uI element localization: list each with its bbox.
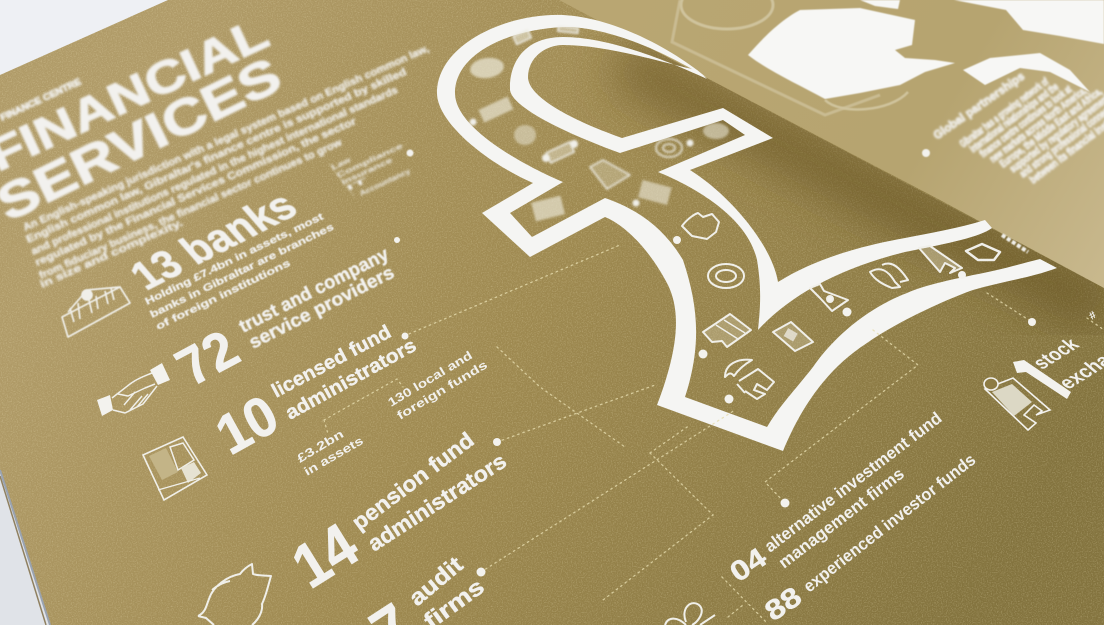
stat: 7 audit firms — [359, 551, 489, 625]
dotted connector lines — [324, 245, 1104, 623]
stat: 72 trust and company service providers: trust and company — [235, 243, 392, 337]
right page — [559, 0, 1104, 288]
icon: money bag — [810, 284, 852, 316]
stat: 7 audit firms: audit — [404, 551, 468, 611]
icon: document — [773, 322, 813, 351]
right page paragraph — [958, 76, 1104, 186]
stat: 88 experienced investor funds — [759, 450, 979, 625]
stat: 10 licensed fund administrators: licensed fund — [268, 321, 395, 402]
list dot — [406, 150, 414, 156]
stat: 04 alternative investment fund management firms: alternative investment fund — [761, 408, 945, 556]
icon: handshake — [97, 363, 170, 416]
icon: money bag — [590, 160, 630, 189]
stat dot 14 — [493, 438, 501, 446]
icon: umbrella and house — [724, 360, 774, 404]
world map — [748, 0, 1104, 99]
icon: vault — [469, 56, 505, 80]
stat: 72 trust and company service providers — [165, 243, 397, 397]
fund note: foreign funds — [394, 357, 490, 423]
pound sign inner contour — [510, 37, 992, 330]
stat dot 72 — [394, 237, 400, 243]
stat: 10 licensed fund administrators — [205, 321, 420, 466]
stat: 14 pension fund administrators — [281, 427, 511, 602]
intro paragraph: regulated by the Financial Services Commission, the sector — [33, 115, 358, 269]
stat: 72 trust and company service providers: service providers — [245, 261, 397, 353]
icon: document — [143, 437, 207, 500]
icon: small top a — [513, 30, 531, 44]
stat: 72 trust and company service providers: 72 — [165, 320, 250, 397]
icon: piggy bank — [198, 564, 271, 625]
faint circle — [681, 0, 773, 29]
intro paragraph: English common law, Gibraltar's finance centre is supported by skilled — [24, 66, 408, 246]
right page heading: Global partnerships — [931, 69, 1027, 142]
stat: 1 stock exchange: stock — [1028, 334, 1085, 373]
eyebrow: FINANCE CENTRE — [0, 77, 83, 123]
icon: bank — [62, 287, 130, 337]
intro paragraph — [21, 43, 431, 291]
banks description: Holding £7.4bn in assets, most — [143, 211, 326, 308]
right edge mark: # — [1087, 309, 1099, 322]
stat: 04 alternative investment fund management firms: management firms — [775, 464, 908, 572]
icon: people — [703, 123, 729, 139]
icon: ring right — [656, 139, 694, 157]
stat: 13 banks — [121, 183, 336, 333]
assets note: in assets — [302, 433, 366, 479]
stat: 14 pension fund administrators: pension fund — [347, 427, 479, 535]
big number one — [1013, 360, 1071, 399]
white desk top left — [0, 0, 168, 75]
title — [0, 7, 290, 232]
stat: 88 experienced investor funds: experienced investor funds — [800, 450, 979, 596]
assets note — [294, 427, 366, 479]
sectors list: Accountancy — [358, 166, 413, 198]
stat: 04 alternative investment fund management firms — [724, 408, 945, 588]
intro paragraph: An English-speaking jurisdiction with a legal system based on English common law, — [21, 43, 431, 234]
sectors list — [329, 141, 413, 198]
right page dot — [922, 149, 930, 157]
icon: envelope hand — [966, 244, 1000, 260]
stat: 04 alternative investment fund management firms: 04 — [724, 541, 772, 588]
icon: stock exchange building — [984, 378, 1050, 430]
stat: 14 pension fund administrators: 14 — [281, 510, 370, 602]
stat dot 10 — [402, 332, 408, 340]
stat: 10 licensed fund administrators: administrators — [282, 334, 420, 424]
stat: 13 banks: 13 banks — [121, 183, 307, 299]
assets note: £3.2bn — [294, 427, 346, 466]
intro paragraph: in size and complexity. — [38, 217, 185, 291]
band icons: upper loop — [469, 26, 729, 221]
sectors list: IT — [345, 175, 370, 193]
sectors list: Insurance — [340, 155, 394, 187]
icon: safe — [531, 196, 565, 221]
icon: clipboard — [919, 246, 966, 279]
icon: building — [470, 96, 513, 126]
sectors list: Law — [330, 155, 352, 172]
banks description — [143, 211, 336, 333]
icon: gift bow — [665, 603, 715, 625]
band icons: lower stem — [673, 213, 1028, 404]
fund note — [385, 348, 490, 423]
banks description: of foreign institutions — [154, 258, 293, 333]
banks description: banks in Gibraltar are branches — [148, 222, 336, 321]
fund note: 130 local and — [385, 348, 475, 410]
faint panel on right page — [672, 0, 880, 115]
icon: hands — [870, 263, 908, 288]
icon: life ring — [708, 264, 744, 288]
icon: partial small — [1002, 235, 1028, 252]
stat: 14 pension fund administrators: administrators — [363, 448, 511, 556]
icon: calculator document — [698, 314, 751, 358]
connector end dot — [780, 498, 790, 508]
faint circle around map — [825, 92, 908, 109]
icon: piggy bank — [673, 213, 719, 244]
icon: note with dots — [542, 140, 578, 163]
intro paragraph: from fiduciary business, the financial sector continues to grow — [37, 136, 344, 282]
fold shadow — [620, 60, 1104, 310]
stat: 1 stock exchange — [1013, 333, 1104, 399]
stat: 10 licensed fund administrators: 10 — [205, 382, 288, 466]
white desk and page edges bottom left — [0, 470, 50, 625]
icon: small top b — [558, 26, 578, 33]
stat dot audit — [476, 568, 486, 576]
sectors list: Compliance — [335, 141, 404, 180]
intro paragraph: and professional institutions regulated in the highest international standards — [29, 84, 400, 258]
icon: ring small — [514, 125, 536, 145]
pound sign outer contour — [437, 15, 1057, 451]
connector end dot right — [1028, 318, 1036, 326]
icon: calendar — [632, 180, 672, 206]
